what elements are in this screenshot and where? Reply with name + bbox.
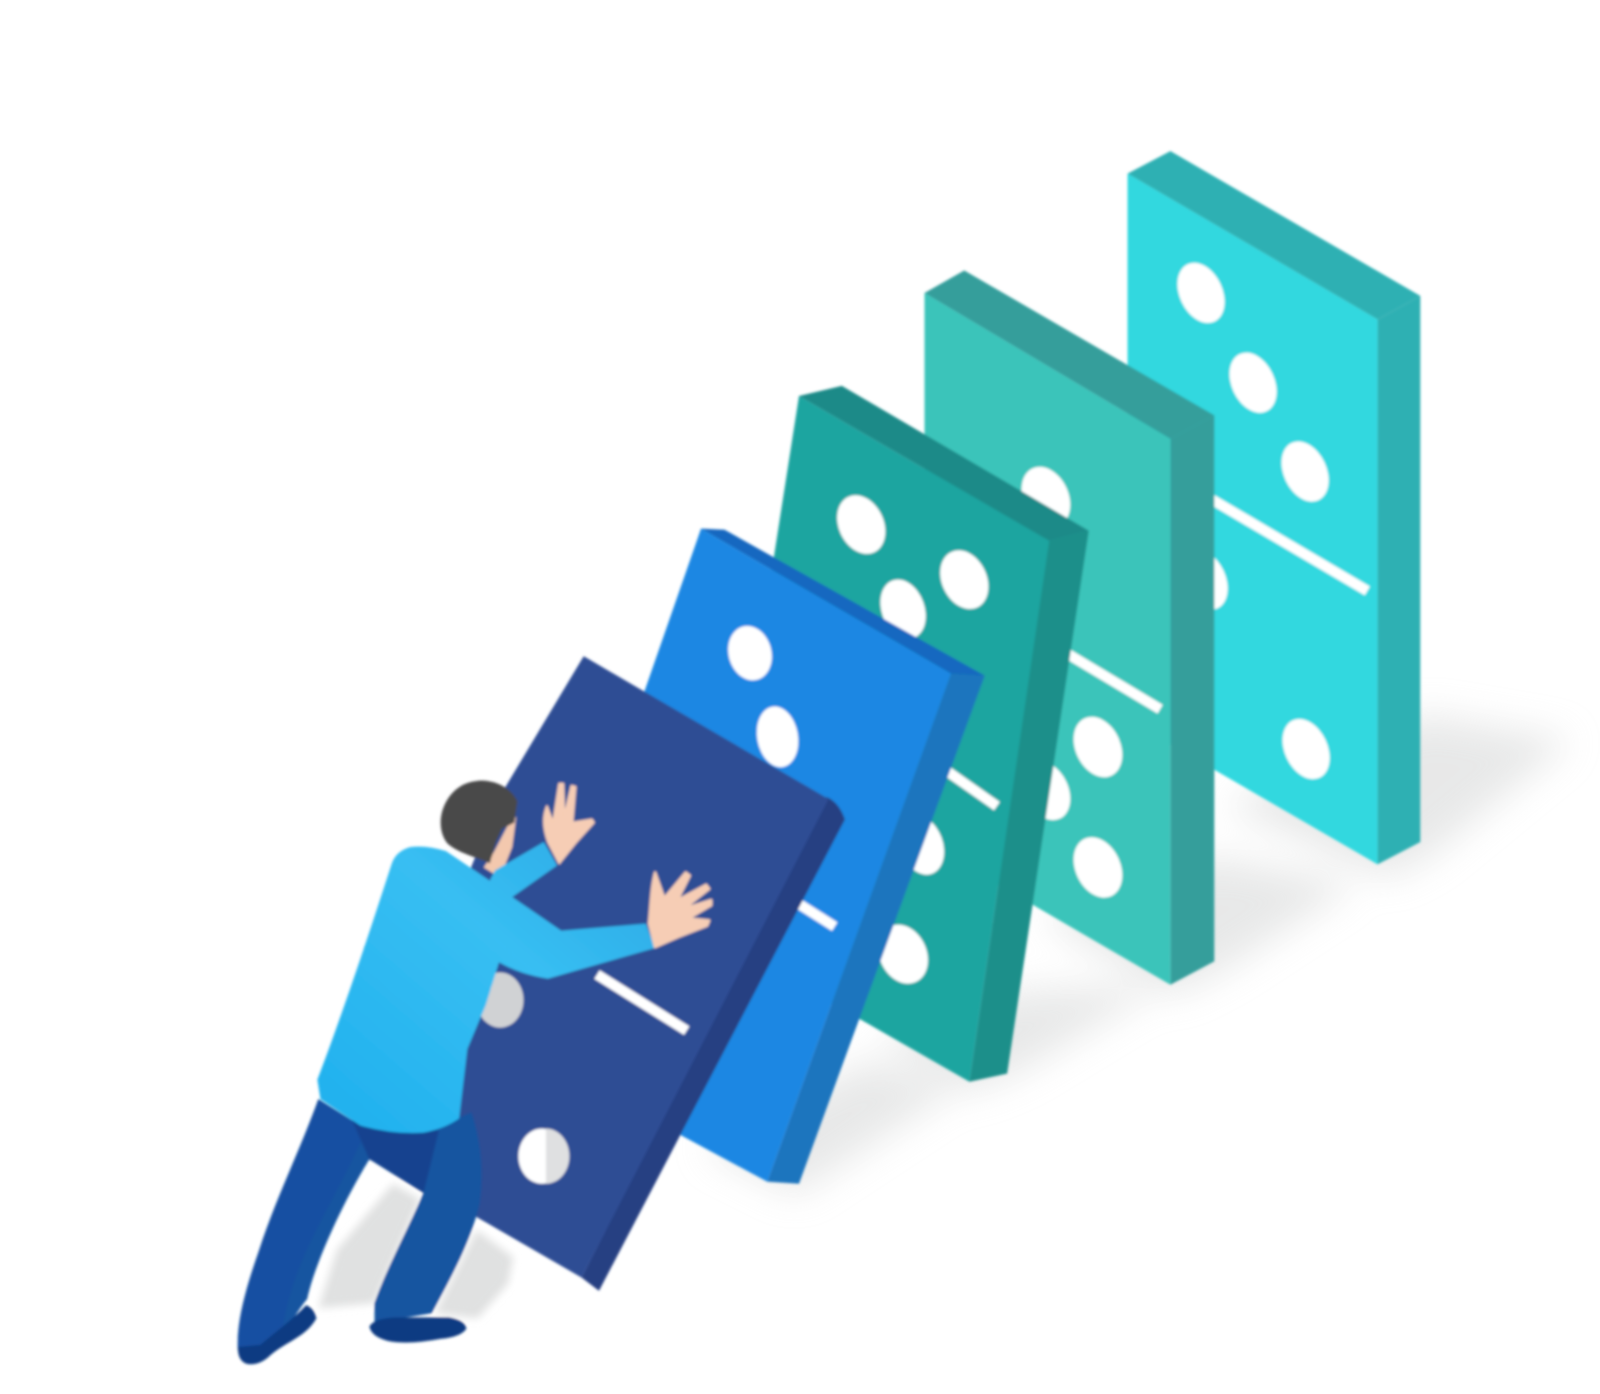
hand: lower <box>649 873 711 947</box>
domino 3: dark teal tilted <box>714 386 1089 1082</box>
hand: upper <box>544 784 594 863</box>
domino 1: navy being pushed <box>357 656 845 1291</box>
floor shadows <box>704 714 1571 1194</box>
domino 2: bright blue tilted <box>520 529 985 1184</box>
domino 4: teal <box>924 270 1214 985</box>
shoes <box>238 1305 466 1364</box>
shirt <box>317 842 655 1133</box>
man pushing domino <box>238 781 711 1364</box>
trousers <box>238 1099 482 1349</box>
domino 5: cyan three-two <box>1128 151 1420 864</box>
head <box>441 781 517 878</box>
shadows under man <box>318 1184 513 1318</box>
